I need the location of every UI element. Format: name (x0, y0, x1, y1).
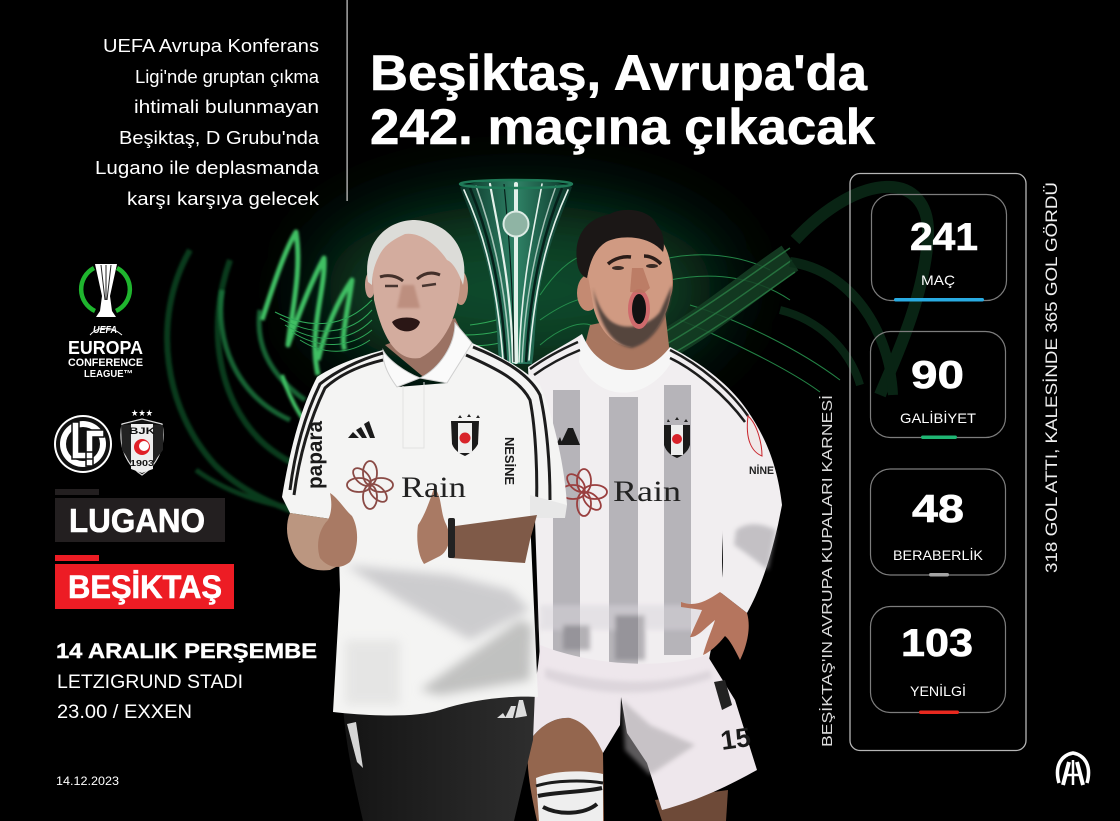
date: 14.12.2023 (56, 774, 119, 788)
intro text: Lugano ile deplasmanda (95, 157, 320, 178)
logo: UEFA Europa Conference League: CONFERENCE (68, 357, 143, 369)
logo: FC Lugano (54, 415, 112, 473)
intro text: UEFA Avrupa Konferans (103, 35, 319, 56)
player sponsor flower (561, 469, 607, 516)
player sleeve shading (734, 524, 776, 570)
shorts number: 15 (719, 722, 753, 756)
logo: Beşiktaş crest: 1903 (130, 459, 155, 468)
vertical label: goals: 318 GOL ATTI, KALESİNDE 365 GOL GÖRDÜ (1042, 182, 1061, 573)
player head and neck (576, 210, 673, 398)
player sponsor text: Rain (613, 475, 681, 508)
match details: 23.00 / EXXEN (57, 702, 192, 723)
title: Beşiktaş, Avrupa'da (370, 45, 868, 101)
logo: UEFA Europa Conference League: UEFA (93, 325, 117, 336)
stat: wins: GALİBİYET (900, 409, 976, 426)
player grey shirt stripes (553, 385, 691, 667)
stat: losses (870, 606, 1006, 714)
coach shirt stripes (290, 347, 550, 516)
coach sleeve sponsor: papara: papara (304, 421, 327, 489)
coach shirt (282, 343, 567, 716)
player: Beşiktaş footballer (527, 210, 782, 821)
coach collar (383, 323, 472, 387)
logo: UEFA Europa Conference League: LEAGUE™ (84, 369, 133, 380)
logo: UEFA Europa Conference League: EUROPA (68, 338, 143, 358)
coach placket (403, 382, 424, 448)
player shirt (528, 334, 782, 665)
team: Beşiktaş: BEŞİKTAŞ (68, 569, 222, 605)
team: Lugano (55, 489, 225, 542)
player sleeve badge (747, 416, 762, 456)
logo: Beşiktaş crest (121, 408, 163, 475)
trophy (460, 180, 572, 364)
shorts shading (545, 668, 712, 775)
player sleeve sponsor: NİNE (749, 464, 774, 477)
player shirt folds (540, 605, 705, 660)
player shoulder stripes (530, 342, 748, 422)
player legs (527, 718, 728, 821)
vertical label: record: BEŞİKTAŞ'IN AVRUPA KUPALARI KARNESİ (818, 395, 836, 747)
stat: draws (870, 469, 1006, 576)
stat: wins (870, 332, 1006, 439)
coach sleeve sponsor: nesine: NESİNE (502, 437, 517, 485)
intro text (95, 35, 320, 209)
stat: losses: YENİLGİ (910, 682, 966, 699)
logo: Anadolu Agency (1057, 753, 1089, 785)
green ribbons left (167, 232, 525, 525)
match details (56, 640, 317, 723)
intro text: karşı karşıya gelecek (127, 188, 320, 209)
coach right hand (417, 488, 449, 564)
stat: matches (872, 194, 1006, 302)
match details: 14 ARALIK PERŞEMBE (56, 640, 317, 663)
stat: wins: 90 (911, 354, 964, 397)
intro text: Ligi'nde gruptan çıkma (135, 66, 320, 87)
logo: Beşiktaş crest: BJK (129, 426, 156, 436)
team: Lugano: LUGANO (69, 502, 205, 539)
green ribbons right (540, 187, 928, 395)
coach sponsor text: Rain (401, 471, 466, 504)
intro text: ihtimali bulunmayan (134, 96, 319, 117)
stats panel (850, 174, 1026, 750)
stat: draws: BERABERLİK (893, 546, 984, 563)
coach left arm (287, 513, 350, 570)
coach left hand (318, 493, 357, 567)
coach crest (451, 414, 480, 456)
coach head (365, 220, 468, 380)
player shorts (528, 645, 757, 810)
stat: matches: MAÇ (921, 272, 955, 288)
player adidas mark (556, 428, 580, 445)
coach shirt shading (345, 565, 532, 705)
team: Beşiktaş (55, 555, 234, 609)
background green glow (320, 205, 720, 375)
shorts crest (714, 680, 732, 710)
player hand (681, 592, 749, 660)
coach adidas mark (348, 421, 375, 438)
stat: losses: 103 (901, 622, 973, 665)
intro text: Beşiktaş, D Grubu'nda (119, 127, 320, 148)
stat: matches: 241 (910, 216, 978, 259)
player collar (579, 334, 674, 393)
logo: Beşiktaş crest: ★★★ (131, 408, 153, 418)
stat: draws: 48 (912, 488, 964, 531)
coach: Rıza Çalımbay (282, 220, 567, 821)
coach sponsor flower (347, 461, 393, 509)
title: 242. maçına çıkacak (370, 99, 875, 155)
player crest (664, 417, 690, 458)
title (370, 45, 875, 155)
coach right arm (448, 515, 537, 563)
divider line (346, 0, 348, 201)
coach trousers (343, 690, 535, 821)
coach sleeve cuff (530, 495, 567, 518)
logo: UEFA Europa Conference League (68, 264, 143, 380)
coach watch (448, 518, 455, 558)
match details: LETZIGRUND STADI (57, 672, 243, 693)
